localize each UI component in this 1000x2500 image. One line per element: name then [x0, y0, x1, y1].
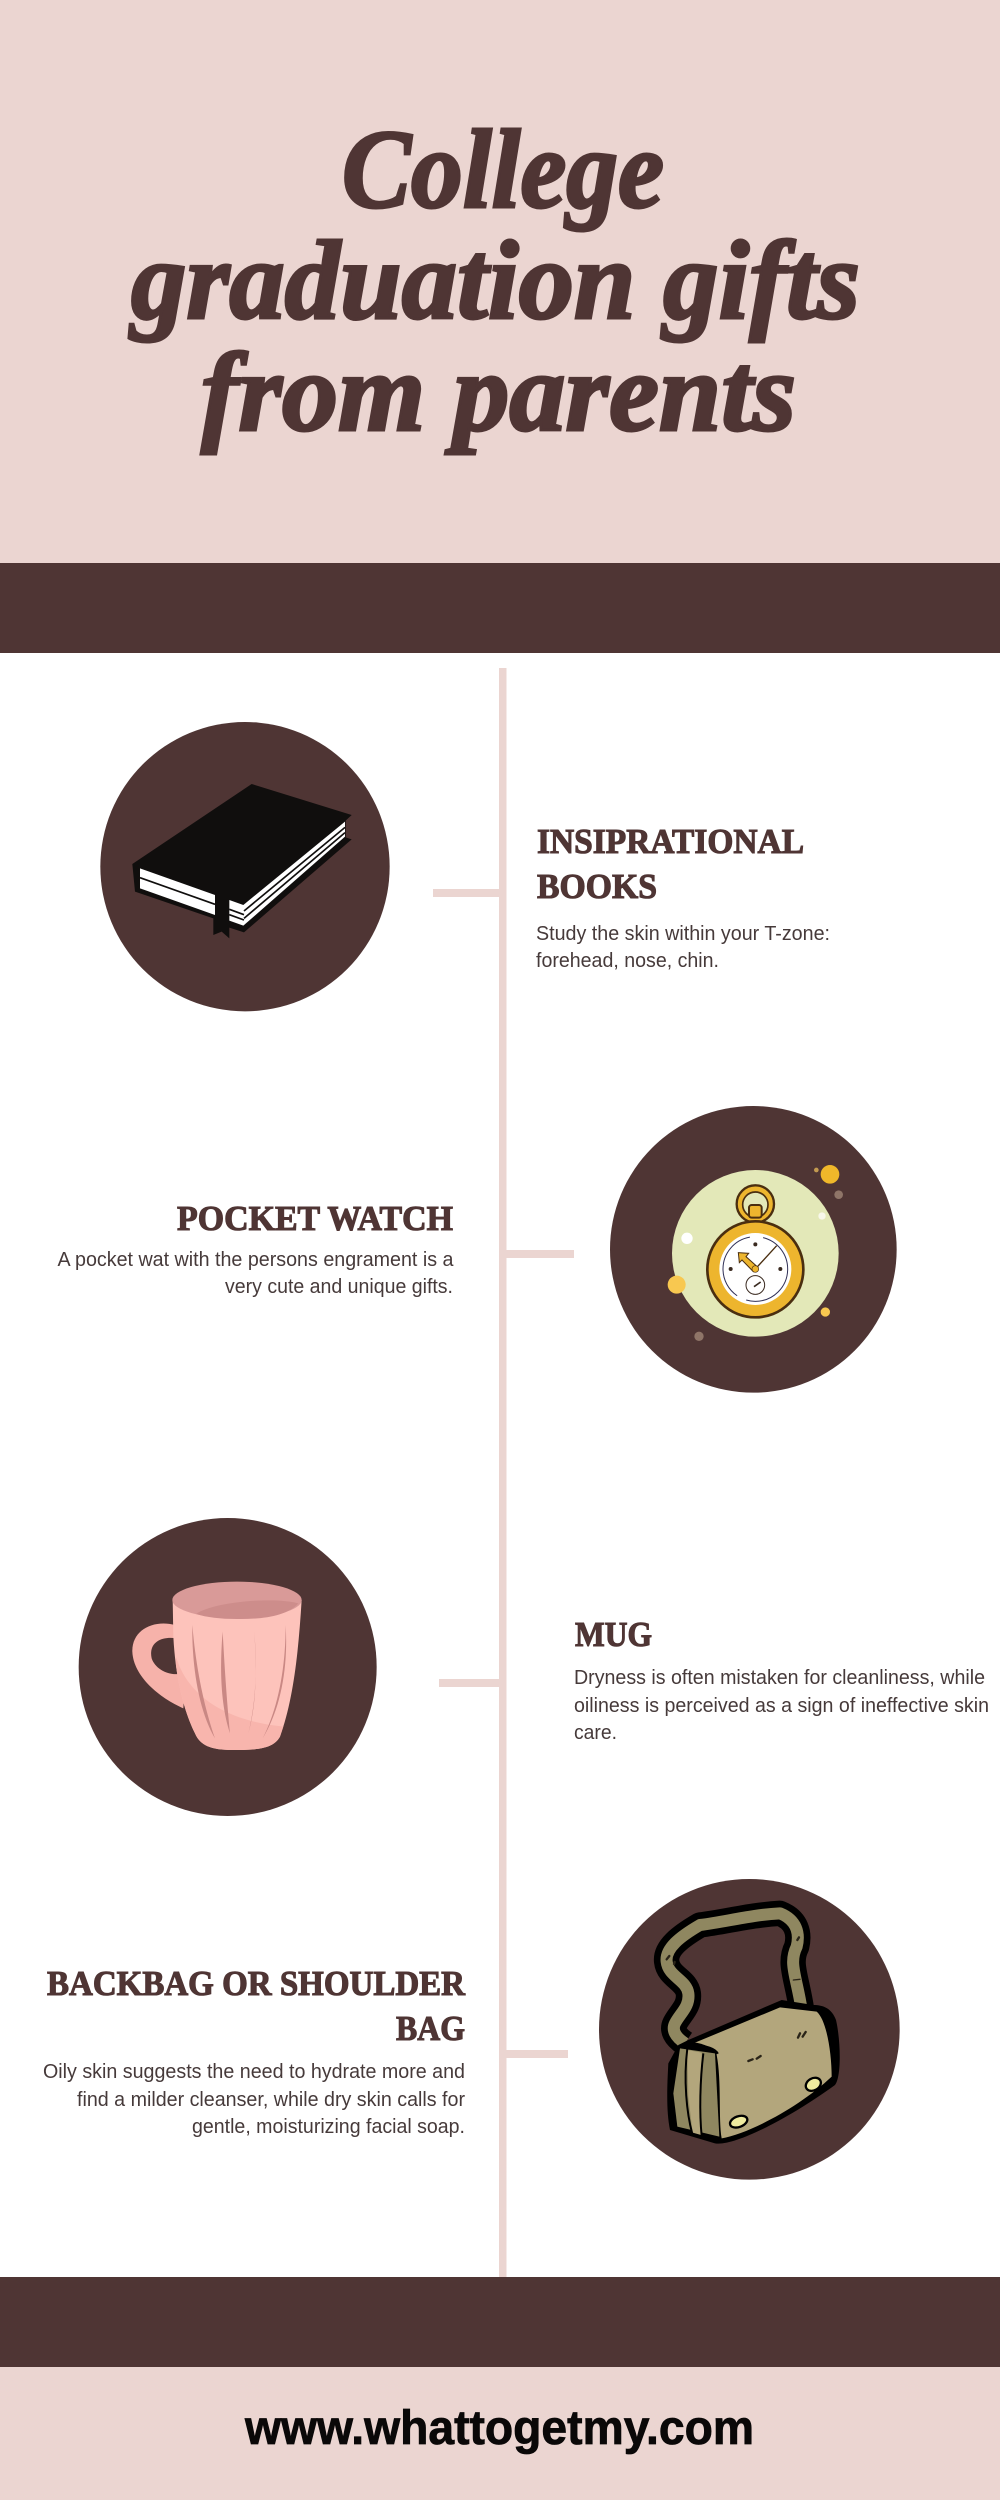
text block: inspirational books: forehead, nose, chin.	[536, 949, 719, 972]
text block: bag: find a milder cleanser, while dry skin calls for	[77, 2088, 465, 2111]
text block: mug	[574, 1615, 989, 1744]
text block: pocket watch: POCKET WATCH	[177, 1199, 453, 1238]
text block: bag: gentle, moisturizing facial soap.	[192, 2115, 465, 2138]
text block: mug: MUG	[575, 1615, 652, 1654]
text block: bag	[43, 1964, 466, 2138]
text block: pocket watch: A pocket wat with the persons engrament is a	[58, 1248, 454, 1271]
footer url: www.whattogetmy.com	[244, 2402, 754, 2455]
text block: mug: care.	[574, 1721, 617, 1744]
connector: books	[433, 889, 499, 897]
text block: mug: oiliness is perceived as a sign of ineffective skin	[574, 1694, 989, 1717]
text block: pocket watch: very cute and unique gifts.	[225, 1275, 453, 1298]
connector: mug	[439, 1679, 499, 1687]
connector: pocket watch	[506, 1250, 574, 1258]
icon: book	[100, 722, 390, 1011]
icon: mug	[79, 1518, 377, 1816]
text block: inspirational books: INSIPRATIONAL	[537, 822, 804, 861]
bottom dark band	[0, 2277, 1000, 2367]
text block: bag: BACKBAG OR SHOULDER	[47, 1964, 466, 2003]
footer panel	[0, 2367, 1000, 2500]
title: graduation gifts	[128, 219, 860, 343]
text block: inspirational books: Study the skin within your T-zone:	[536, 922, 830, 945]
text block: inspirational books: BOOKS	[537, 867, 657, 906]
title: College	[342, 108, 664, 232]
connector: bag	[506, 2050, 568, 2058]
text block: mug: Dryness is often mistaken for cleanliness, while	[574, 1666, 985, 1689]
text block: pocket watch	[58, 1199, 454, 1298]
text block: bag: BAG	[396, 2009, 465, 2048]
title: from parents	[201, 331, 796, 455]
header panel	[0, 0, 1000, 563]
top dark band	[0, 563, 1000, 653]
text block: inspirational books	[536, 822, 830, 972]
timeline spine	[499, 668, 506, 2277]
title	[128, 108, 860, 455]
text block: bag: Oily skin suggests the need to hydrate more and	[43, 2060, 465, 2083]
icon: shoulder bag	[599, 1879, 900, 2180]
icon: pocket watch	[610, 1106, 897, 1393]
